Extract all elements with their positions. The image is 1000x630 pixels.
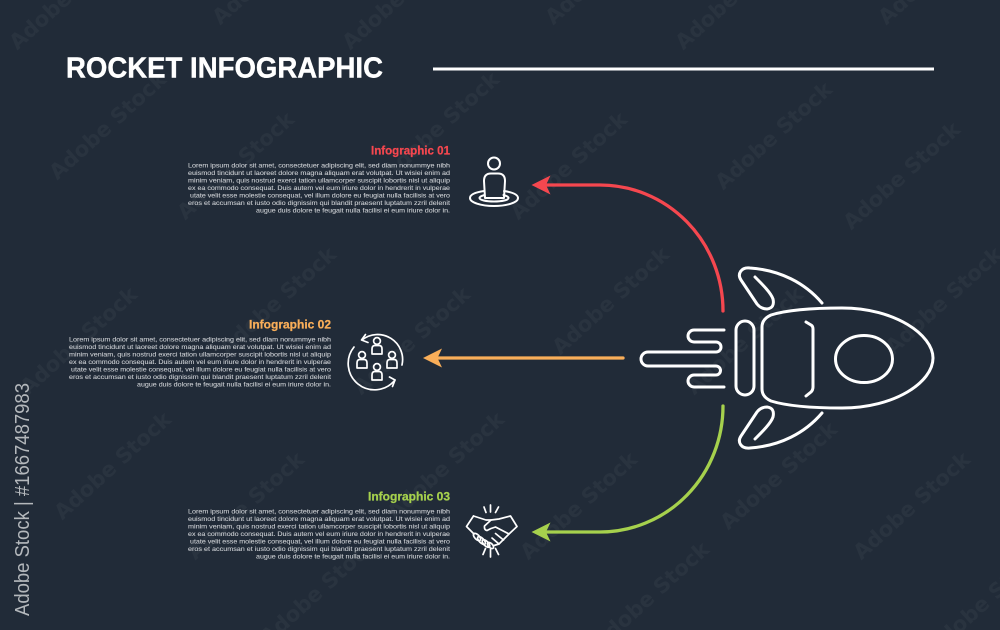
text: Adobe Stock [682,282,809,399]
text block: infographic 02: augue duis dolore te feugait nulla facilisi ei eum iriure dolor in. [137,382,331,388]
rocket nozzle [736,321,754,395]
text block: infographic 03 [188,490,450,560]
text block: infographic 03: Lorem ipsum dolor sit amet, consectetuer adipiscing elit, sed diam nonummye nibh [188,508,450,516]
arrow: orange [423,348,623,368]
text block: infographic 03: Infographic 03 [368,490,450,504]
text: Adobe Stock [548,242,675,359]
text block: infographic 03: ex ea commodo consequat. Duis autem vel eum iriure dolor in hendrerit in vulperae [188,531,450,538]
text block: infographic 02: ex ea commodo consequat. Duis autem vel eum iriure dolor in hendrerit in vulperae [69,359,331,366]
text: Adobe Stock [849,447,976,564]
icon: people in rotating cycle [348,334,403,390]
text: Adobe Stock [839,117,966,234]
text block: infographic 02: Infographic 02 [249,318,331,332]
text block: infographic 02 [69,318,331,388]
watermark label: Adobe Stock | #1667487983 [12,383,34,616]
text block: infographic 01: Infographic 01 [371,144,450,158]
text block: infographic 03: utate velit esse molestie consequat, vel illum dolore eu feugiat nulla facilisis at vero [190,538,450,546]
text: Adobe Stock [173,107,300,224]
arrow: red [532,176,723,311]
text block: infographic 01: eros et accumsan et iusto odio dignissim qui blandit praesent luptatum zzril delenit [188,200,450,207]
text: Adobe Stock [516,447,643,564]
text: Adobe Stock [378,67,505,184]
rocket top fin [739,268,822,309]
text: Adobe Stock [383,407,510,524]
text block: infographic 02: Lorem ipsum dolor sit amet, consectetuer adipiscing elit, sed diam nonummye nibh [69,336,331,344]
text block: infographic 01 [188,144,450,214]
text block: infographic 02: eros et accumsan et iusto odio dignissim qui blandit praesent luptatum zzril delenit [69,374,331,381]
rocket [641,268,933,448]
icon: handshake [466,505,517,557]
text: Adobe Stock [349,282,476,399]
text block: infographic 01: ex ea commodo consequat. Duis autem vel eum iriure dolor in hendrerit in vulperae [188,185,450,192]
text: Adobe Stock [711,77,838,194]
text: Adobe Stock [45,67,172,184]
text block: infographic 01: augue duis dolore te feugait nulla facilisi ei eum iriure dolor in. [256,208,450,214]
text block: infographic 01: utate velit esse molestie consequat, vel illum dolore eu feugiat nulla facilisis at vero [190,192,450,200]
text: Adobe Stock [183,447,310,564]
text block: infographic 03: eros et accumsan et iusto odio dignissim qui blandit praesent luptatum zzril delenit [188,546,450,553]
text: Adobe Stock [506,107,633,224]
text block: infographic 03: minim veniam, quis nostrud exerci tation ullamcorper suscipit lobortis nisl ut aliquip [188,524,450,530]
arrow: green [532,406,723,542]
rocket window [836,336,892,382]
text: Adobe Stock [215,242,342,359]
text: Adobe Stock [50,407,177,524]
text block: infographic 03: euismod tincidunt ut laoreet dolore magna aliquam erat volutpat. Ut wisiei enim ad [188,516,450,523]
text: Adobe Stock [16,282,143,399]
rocket body [762,308,933,408]
rocket bottom fin [739,407,822,448]
text: Adobe Stock [716,417,843,534]
text block: infographic 02: minim veniam, quis nostrud exerci tation ullamcorper suscipit lobortis nisl ut aliquip [69,352,331,358]
icon: person on target [470,158,518,206]
text block: infographic 01: Lorem ipsum dolor sit amet, consectetuer adipiscing elit, sed diam nonummye nibh [188,162,450,170]
text block: infographic 02: utate velit esse molestie consequat, vel illum dolore eu feugiat nulla facilisis at vero [71,366,331,374]
text block: infographic 02: euismod tincidunt ut laoreet dolore magna aliquam erat volutpat. Ut wisiei enim ad [69,344,331,351]
text block: infographic 01: euismod tincidunt ut laoreet dolore magna aliquam erat volutpat. Ut wisiei enim ad [188,170,450,177]
text block: infographic 01: minim veniam, quis nostrud exerci tation ullamcorper suscipit lobortis nisl ut aliquip [188,178,450,184]
text block: infographic 03: augue duis dolore te feugait nulla facilisi ei eum iriure dolor in. [256,554,450,560]
rocket flames [641,330,724,387]
title: ROCKET INFOGRAPHIC [66,52,383,84]
